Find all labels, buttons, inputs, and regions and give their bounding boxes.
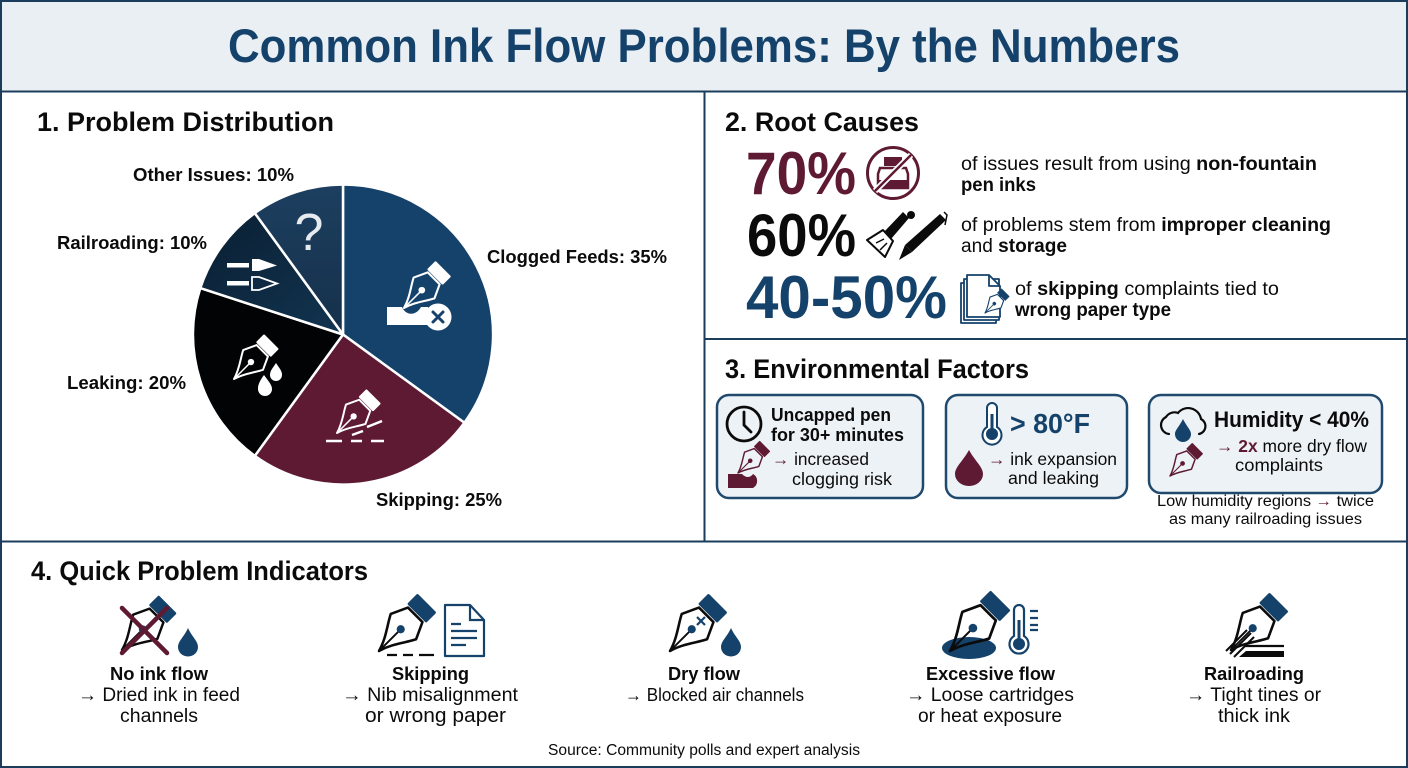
icon: railroading nibs <box>227 259 277 290</box>
text: railroading: Railroading <box>1204 664 1304 684</box>
note: low humidity line one: Low humidity regions → twice <box>1157 493 1374 510</box>
text: pen inks: pen inks <box>961 175 1036 196</box>
indicator: no ink flow <box>78 592 240 727</box>
slice: skipping 25% <box>255 334 464 485</box>
text: skipping complaints: of skipping complaints tied to <box>1015 279 1279 300</box>
text: thick ink: thick ink <box>1218 706 1291 727</box>
icon: crossed nib and drop <box>110 592 198 662</box>
text: or wrong paper: or wrong paper <box>365 705 506 727</box>
text: over 80F: > 80°F <box>1010 408 1090 439</box>
icon: railroading nib <box>1218 589 1292 663</box>
text: channels: channels <box>120 706 198 727</box>
text: no ink flow: No ink flow <box>110 664 209 684</box>
stat: 40-50%: 40-50% <box>746 264 947 331</box>
slice: railroading 10% <box>200 213 343 334</box>
slice: leaking 20% <box>193 288 343 456</box>
text: or heat exposure: or heat exposure <box>918 706 1062 727</box>
text: improper cleaning: of problems stem from improper cleaning <box>961 215 1331 236</box>
label: leaking: Leaking: 20% <box>67 373 186 393</box>
note: low humidity line two: as many railroading issues <box>1169 511 1362 528</box>
text: dried ink in feed: → Dried ink in feed <box>78 685 240 706</box>
source note: Source: Community polls and expert analysis <box>548 742 860 759</box>
stat: 70%: 70% <box>746 140 856 207</box>
text: wrong paper type: wrong paper type <box>1014 300 1171 321</box>
slice: clogged feeds 35% <box>343 184 493 423</box>
icon: skipping nib <box>326 387 384 443</box>
panel: environmental factors <box>717 354 1382 528</box>
panel: quick problem indicators <box>31 556 1322 759</box>
text: tight tines: → Tight tines or <box>1186 685 1322 706</box>
text: humidity heading: Humidity < 40% <box>1214 407 1369 432</box>
text: 2x more dry flow: → 2x more dry flow <box>1216 436 1367 456</box>
icon: clock <box>727 407 761 441</box>
icon: flooding nib and thermometer <box>937 587 1038 664</box>
icon: question mark: ? <box>295 204 323 262</box>
icon: paper stack and nib <box>961 275 1011 323</box>
text: uncapped pen heading: Uncapped pen <box>771 405 891 425</box>
text: clogging risk: clogging risk <box>792 469 892 489</box>
icon: leaking nib <box>224 332 282 396</box>
card: uncapped pen <box>717 395 923 498</box>
icon: dry nib and drop <box>657 590 741 664</box>
text: blocked air channels: → Blocked air channels <box>625 685 804 705</box>
text: storage: and storage <box>961 236 1067 257</box>
text: excessive flow: Excessive flow <box>926 664 1056 684</box>
card: humidity <box>1149 395 1382 493</box>
icon: no bottled ink <box>868 148 918 198</box>
heading: environmental factors: 3. Environmental Factors <box>725 354 1029 384</box>
icon: thermometer <box>982 403 1002 445</box>
indicator: excessive flow <box>906 587 1074 727</box>
text: for 30+ minutes: for 30+ minutes <box>771 425 904 445</box>
label: other issues: Other Issues: 10% <box>133 165 294 185</box>
label: clogged feeds: Clogged Feeds: 35% <box>487 247 667 267</box>
text: skipping: Skipping <box>392 664 469 684</box>
panel: root causes <box>725 107 1331 331</box>
slice: other issues 10% <box>255 184 343 334</box>
text: dry flow: Dry flow <box>668 664 741 684</box>
text: increased clogging risk: → increased <box>772 449 869 469</box>
icon: nib and document <box>366 590 484 664</box>
heading: root causes: 2. Root Causes <box>725 107 919 137</box>
stat: 60%: 60% <box>747 202 856 269</box>
text: nib misalignment: → Nib misalignment <box>342 685 519 706</box>
text: loose cartridges: → Loose cartridges <box>906 685 1074 706</box>
icon: burgundy nib <box>1163 441 1205 483</box>
header band <box>1 1 1407 91</box>
pie chart <box>193 184 493 485</box>
text: and leaking: and leaking <box>1008 468 1099 488</box>
text: non-fountain inks: of issues result from using non-fountain <box>961 154 1317 175</box>
icon: brush and pen <box>867 211 947 260</box>
icon: clogged nib <box>387 258 454 330</box>
icon: cloud with drop <box>1161 408 1205 442</box>
icon: clogging nib <box>728 439 772 488</box>
card: temperature <box>946 395 1127 498</box>
text: complaints: complaints <box>1235 455 1323 475</box>
title: Common Ink Flow Problems: By the Numbers <box>228 19 1180 72</box>
label: railroading: Railroading: 10% <box>57 233 207 253</box>
heading: quick problem indicators: 4. Quick Problem Indicators <box>31 556 368 586</box>
heading: problem distribution: 1. Problem Distribution <box>37 107 334 137</box>
panel: problem distribution <box>37 107 667 510</box>
text: ink expansion: → ink expansion <box>988 449 1117 469</box>
indicator: railroading <box>1186 589 1322 727</box>
icon: ink drop <box>955 450 983 486</box>
indicator: skipping <box>342 590 519 727</box>
label: skipping: Skipping: 25% <box>376 490 502 510</box>
indicator: dry flow <box>625 590 804 705</box>
